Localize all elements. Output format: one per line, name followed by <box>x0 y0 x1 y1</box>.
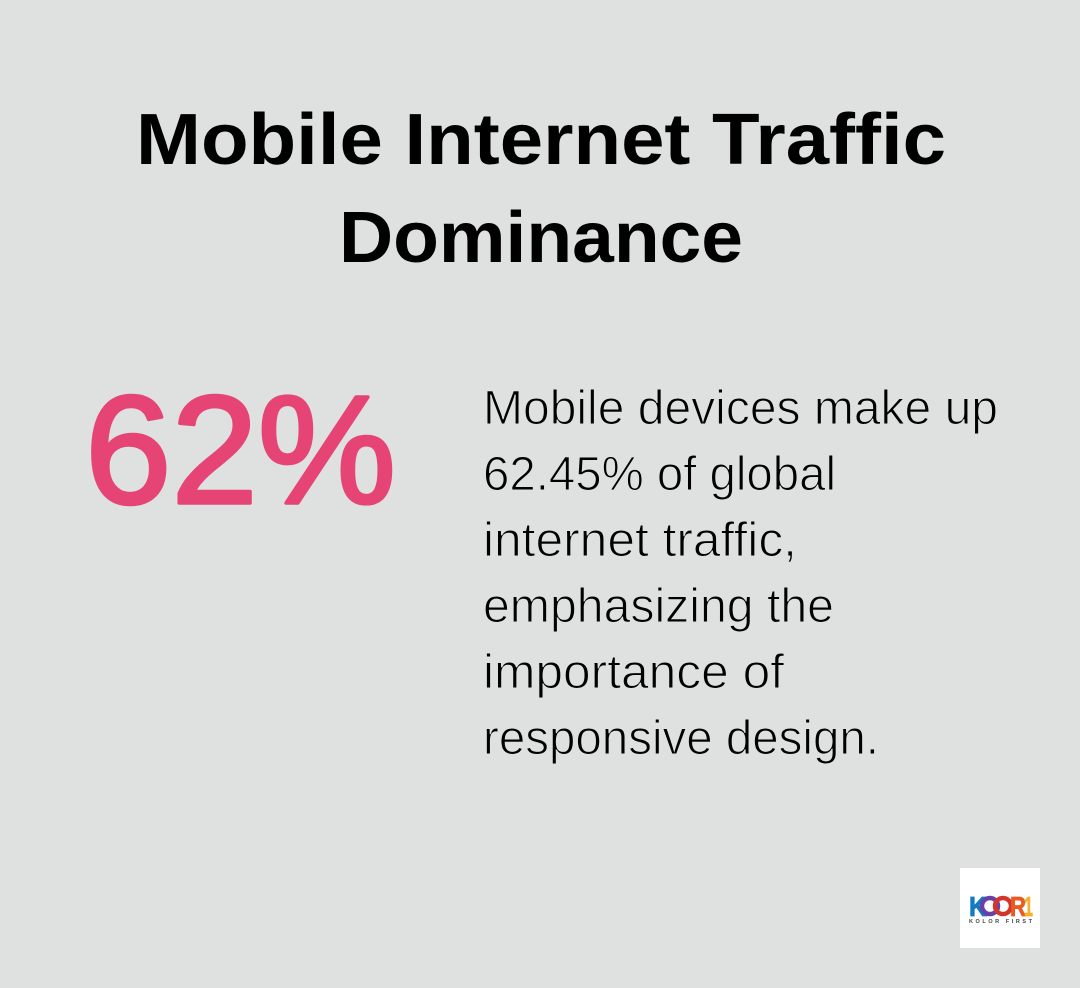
description text <box>483 381 998 765</box>
title: Mobile Internet Traffic <box>136 100 946 180</box>
title <box>136 100 946 278</box>
title: Dominance <box>339 198 743 278</box>
big statistic: 62%: 62% <box>85 364 396 536</box>
logo wordmark: K <box>969 891 987 922</box>
description text: 62.45% of global <box>483 447 836 501</box>
description text: responsive design. <box>483 711 879 765</box>
logo wordmark: 1 <box>1024 891 1033 922</box>
description text: internet traffic, <box>483 513 797 567</box>
logo wordmark <box>969 891 1033 922</box>
description text: Mobile devices make up <box>483 381 998 435</box>
logo tagline: KOLOR FIRST <box>969 919 1033 925</box>
logo wordmark: R <box>1010 891 1026 922</box>
description text: importance of <box>483 645 785 699</box>
description text: emphasizing the <box>483 579 834 633</box>
logo: KOOR1 Kolor First <box>960 868 1040 948</box>
